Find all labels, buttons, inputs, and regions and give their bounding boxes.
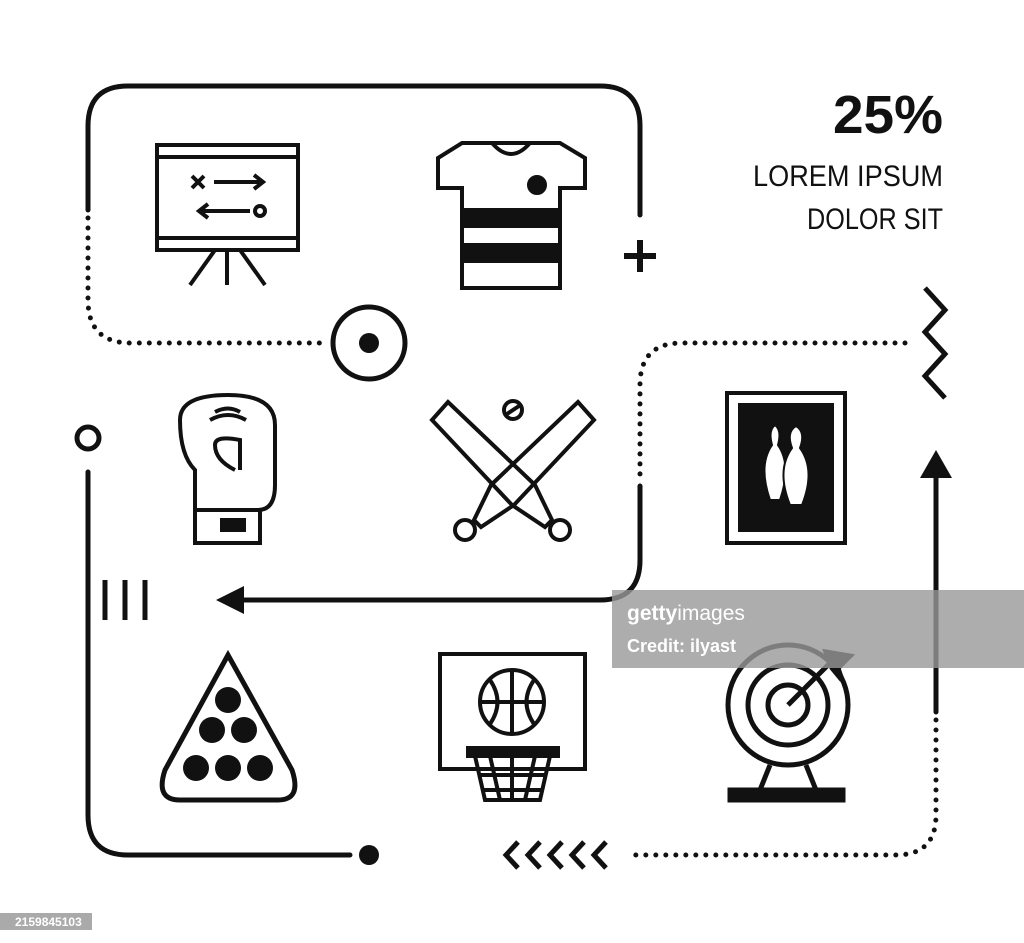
icon: archery target [728, 645, 850, 800]
stat text: 25% [833, 85, 943, 145]
image id badge [0, 913, 92, 930]
icon: billiard rack [162, 655, 295, 800]
top-left rounded path [88, 86, 640, 343]
icon: striped shirt [438, 143, 585, 288]
icon: basketball hoop [440, 654, 585, 800]
icon: boxing glove [180, 395, 275, 543]
stat text: LOREM IPSUM [753, 160, 943, 193]
stat text [753, 85, 943, 236]
zigzag [925, 288, 945, 398]
watermark band [612, 590, 1024, 668]
stat text: DOLOR SIT [807, 203, 943, 236]
image id badge: 2159845103 [15, 915, 82, 929]
left path [77, 427, 379, 865]
watermark band: gettyimages [627, 602, 745, 625]
right up arrow and dotted path [635, 450, 952, 855]
icon: bowling frame [727, 393, 845, 543]
icon: target circle [333, 307, 405, 379]
bars III [105, 580, 145, 620]
icon: crossed bats [432, 401, 594, 540]
icon: tactics board [157, 145, 298, 285]
middle path with arrow [216, 343, 905, 614]
chevrons [506, 842, 606, 868]
watermark band: Credit: ilyast [627, 636, 736, 656]
icon: plus [624, 240, 656, 272]
